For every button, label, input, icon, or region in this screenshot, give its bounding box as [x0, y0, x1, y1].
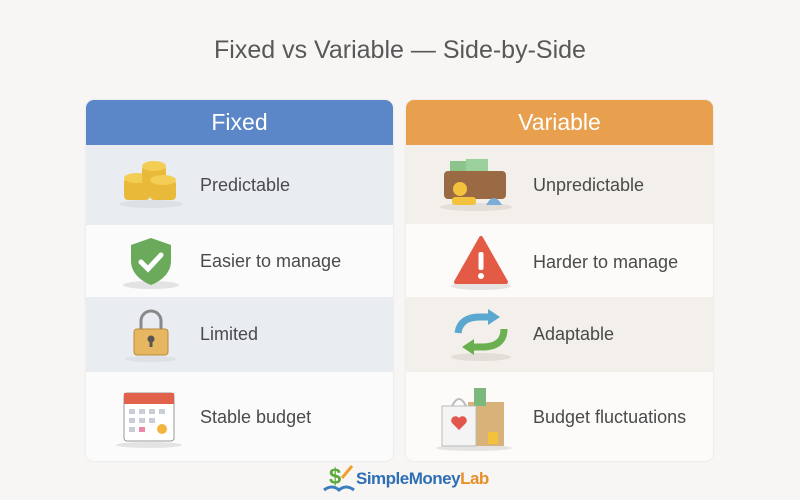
logo: SimpleMoneyLab — [356, 469, 489, 488]
row: harder to manage — [406, 224, 713, 297]
icon: cycle arrows — [451, 309, 511, 361]
icon: wallet — [440, 159, 512, 211]
row: budget fluctuations: Budget fluctuations — [533, 407, 686, 427]
icon: calendar — [116, 392, 182, 448]
row: stable budget — [86, 372, 393, 461]
icon: shopping bags — [436, 388, 512, 451]
row: harder to manage: Harder to manage — [533, 252, 678, 272]
logo — [323, 464, 489, 492]
row: easier to manage — [86, 225, 393, 297]
row: easier to manage: Easier to manage — [200, 251, 341, 271]
icon: shield — [123, 238, 179, 289]
row: limited: Limited — [200, 324, 258, 344]
header: variable — [406, 100, 713, 145]
icon: logo mark: $ — [329, 464, 341, 489]
header: fixed: Fixed — [211, 109, 268, 135]
icon: logo mark — [323, 464, 355, 492]
panel: fixed — [86, 100, 393, 461]
row: budget fluctuations — [406, 372, 713, 461]
title: Fixed vs Variable — Side-by-Side — [214, 36, 586, 64]
icon: coins — [119, 161, 183, 208]
header: variable: Variable — [518, 109, 601, 135]
row: adaptable: Adaptable — [533, 324, 614, 344]
row: adaptable — [406, 297, 713, 372]
row: unpredictable — [406, 145, 713, 224]
panel: variable — [406, 100, 713, 461]
icon: warning — [451, 236, 511, 290]
row: predictable: Predictable — [200, 175, 290, 195]
row: predictable — [86, 145, 393, 225]
row: stable budget: Stable budget — [200, 407, 311, 427]
row: limited — [86, 297, 393, 372]
icon: lock — [125, 310, 177, 362]
row: unpredictable: Unpredictable — [533, 175, 644, 195]
header: fixed — [86, 100, 393, 145]
